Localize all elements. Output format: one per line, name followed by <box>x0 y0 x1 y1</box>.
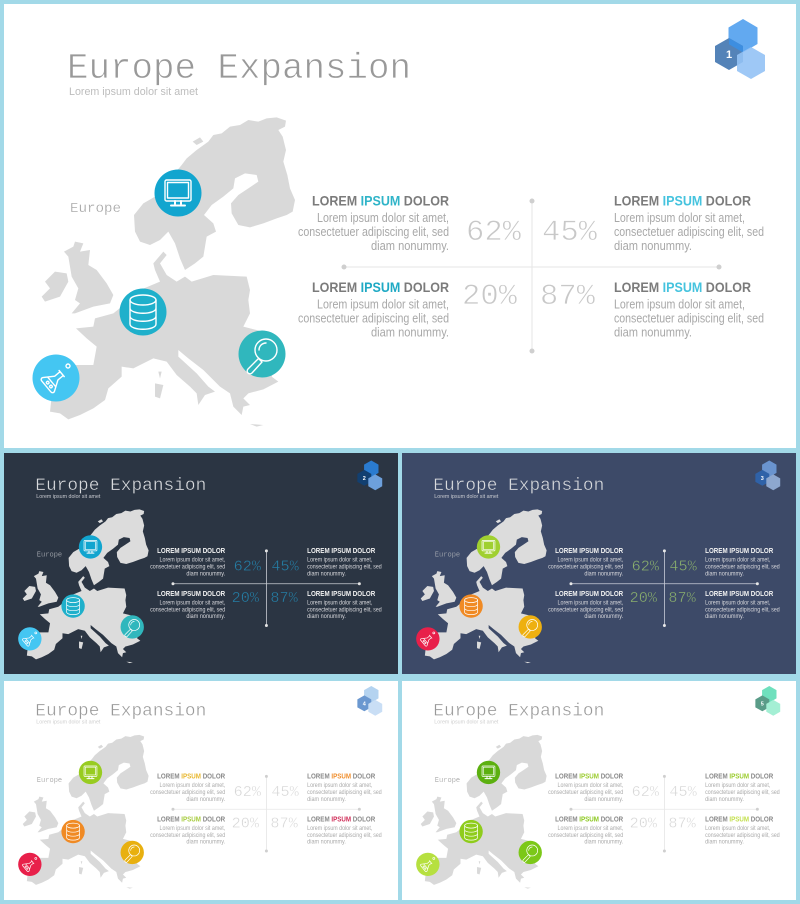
stat: 62%: 62% <box>234 559 261 575</box>
text block: bottom left: Lorem ipsum dolor sit amet, <box>558 825 623 832</box>
text block: top left: diam nonummy. <box>371 238 449 253</box>
text block: top right: consectetuer adipiscing elit, sed <box>307 789 382 796</box>
text block: bottom left: consectetuer adipiscing elit, sed <box>548 832 623 839</box>
text block: top left: consectetuer adipiscing elit, sed <box>150 789 225 796</box>
text block: top left: LOREM IPSUM DOLOR <box>555 774 623 781</box>
stat: 20%: 20% <box>630 591 657 607</box>
text block: bottom right <box>705 591 780 620</box>
icon: database <box>120 288 166 336</box>
text block: bottom right: diam nonummy. <box>307 839 346 846</box>
text block: bottom left <box>548 591 623 620</box>
map of Europe <box>20 735 149 889</box>
stat: 87%: 87% <box>540 280 596 314</box>
text block: bottom right: Lorem ipsum dolor sit amet, <box>705 825 770 832</box>
text block: bottom right: diam nonummy. <box>705 613 744 620</box>
icon: database <box>61 594 85 618</box>
text block: top right: consectetuer adipiscing elit, sed <box>614 224 764 239</box>
text block: top right <box>705 774 780 803</box>
text block: top left: Lorem ipsum dolor sit amet, <box>160 782 225 789</box>
icon: hexagon badge 2 <box>357 460 382 490</box>
text block: bottom left <box>298 279 449 340</box>
text block: top right: Lorem ipsum dolor sit amet, <box>705 556 770 563</box>
subtitle: Lorem ipsum dolor sit amet <box>69 86 198 98</box>
text block: top left: diam nonummy. <box>584 570 623 577</box>
text block: top right: diam nonummy. <box>614 238 692 253</box>
stat: 45%: 45% <box>669 559 697 575</box>
text block: top right: consectetuer adipiscing elit, sed <box>705 563 780 570</box>
text block: top right <box>307 774 382 803</box>
panel: light slide 5 <box>402 681 796 900</box>
text block: top right: diam nonummy. <box>705 796 744 803</box>
text block: top right: Lorem ipsum dolor sit amet, <box>614 210 745 225</box>
text block: bottom left: LOREM IPSUM DOLOR <box>555 591 623 598</box>
subtitle: Lorem ipsum dolor sit amet <box>434 720 499 726</box>
icon: magnifier <box>519 615 542 639</box>
text block: bottom right: diam nonummy. <box>307 613 346 620</box>
icon: monitor <box>79 761 102 784</box>
text block: top left: consectetuer adipiscing elit, sed <box>548 789 623 796</box>
text block: bottom right: consectetuer adipiscing elit, sed <box>307 832 382 839</box>
icon: hexagon badge 1: 1 <box>726 49 732 61</box>
panel: main slide 1 <box>4 4 796 448</box>
text block: bottom right: consectetuer adipiscing elit, sed <box>705 606 780 613</box>
stat: 87%: 87% <box>668 817 696 833</box>
icon: flask <box>416 627 440 651</box>
text block: bottom right: LOREM IPSUM DOLOR <box>705 591 773 598</box>
icon: hexagon badge 4: 4 <box>363 701 366 707</box>
text block: top right <box>614 192 764 253</box>
title: Europe Expansion <box>433 476 604 496</box>
text block: bottom right <box>614 279 764 340</box>
text block: bottom left <box>150 591 225 620</box>
icon: hexagon badge 1 <box>715 19 765 79</box>
text block: bottom left: diam nonummy. <box>584 839 623 846</box>
text block: bottom left: consectetuer adipiscing elit, sed <box>298 310 449 326</box>
stat: 20%: 20% <box>232 591 259 607</box>
text block: bottom left: consectetuer adipiscing elit, sed <box>150 832 225 839</box>
text block: bottom left: diam nonummy. <box>371 324 449 340</box>
stat: 45%: 45% <box>669 785 697 801</box>
text block: top left <box>298 192 449 253</box>
text block: bottom left <box>150 817 225 846</box>
stat: 87%: 87% <box>668 591 696 607</box>
text block: bottom right <box>307 817 382 846</box>
text block: top left <box>548 548 623 577</box>
icon: flask <box>18 853 42 876</box>
text block: bottom right: Lorem ipsum dolor sit amet, <box>614 296 745 312</box>
text block: top right <box>705 548 780 577</box>
stat: 20%: 20% <box>462 280 518 314</box>
icon: database <box>61 820 85 843</box>
text block: top left: LOREM IPSUM DOLOR <box>555 548 623 555</box>
text block: bottom right: Lorem ipsum dolor sit amet, <box>705 599 770 606</box>
text block: top left: consectetuer adipiscing elit, sed <box>298 224 449 239</box>
text block: bottom right: consectetuer adipiscing elit, sed <box>307 606 382 613</box>
text block: bottom right <box>307 591 382 620</box>
text block: top left: diam nonummy. <box>186 570 225 577</box>
icon: flask <box>18 627 42 651</box>
icon: magnifier <box>238 330 286 378</box>
text block: bottom left: Lorem ipsum dolor sit amet, <box>558 599 623 606</box>
map label: Europe <box>435 551 460 559</box>
icon: monitor <box>477 535 500 559</box>
stat: 87%: 87% <box>270 591 298 607</box>
text block: bottom left: consectetuer adipiscing elit, sed <box>548 606 623 613</box>
text block: top left <box>150 548 225 577</box>
text block: top left: Lorem ipsum dolor sit amet, <box>558 782 623 789</box>
text block: top right: LOREM IPSUM DOLOR <box>307 774 375 781</box>
stat: 87%: 87% <box>270 817 298 833</box>
text block: bottom right: LOREM IPSUM DOLOR <box>614 279 751 295</box>
text block: bottom left: LOREM IPSUM DOLOR <box>312 279 449 295</box>
title: Europe Expansion <box>433 701 604 721</box>
cross divider <box>569 549 759 627</box>
text block: bottom left: diam nonummy. <box>584 613 623 620</box>
stat: 62%: 62% <box>466 216 522 250</box>
text block: top right <box>307 548 382 577</box>
icon: database <box>459 820 483 843</box>
text block: bottom left: LOREM IPSUM DOLOR <box>555 817 623 824</box>
icon: hexagon badge 5 <box>755 686 780 716</box>
cross divider <box>342 198 722 354</box>
cross divider <box>171 775 361 852</box>
text block: top right: Lorem ipsum dolor sit amet, <box>307 782 372 789</box>
map of Europe <box>418 735 547 889</box>
text block: bottom right: LOREM IPSUM DOLOR <box>307 591 375 598</box>
icon: magnifier <box>121 615 144 639</box>
cross divider <box>171 549 361 627</box>
icon: flask <box>32 354 80 402</box>
text block: top right: consectetuer adipiscing elit, sed <box>307 563 382 570</box>
icon: hexagon badge 3: 3 <box>761 476 764 482</box>
text block: bottom right: consectetuer adipiscing elit, sed <box>614 310 764 326</box>
text block: top left <box>548 774 623 803</box>
subtitle: Lorem ipsum dolor sit amet <box>36 720 101 726</box>
text block: bottom right: diam nonummy. <box>614 324 692 340</box>
text block: top left: Lorem ipsum dolor sit amet, <box>558 556 623 563</box>
text block: top left: Lorem ipsum dolor sit amet, <box>160 556 225 563</box>
text block: top left <box>150 774 225 803</box>
text block: top right: consectetuer adipiscing elit, sed <box>705 789 780 796</box>
stat: 45%: 45% <box>271 559 299 575</box>
text block: top right: diam nonummy. <box>307 796 346 803</box>
text block: top left: LOREM IPSUM DOLOR <box>157 774 225 781</box>
map of Europe <box>37 117 295 427</box>
text block: bottom left: diam nonummy. <box>186 839 225 846</box>
icon: flask <box>416 853 440 876</box>
stat: 62%: 62% <box>632 559 659 575</box>
text block: bottom right: Lorem ipsum dolor sit amet, <box>307 599 372 606</box>
stat: 62%: 62% <box>632 785 659 801</box>
icon: hexagon badge 2: 2 <box>363 476 366 482</box>
title: Europe Expansion <box>35 701 206 721</box>
panel: navy slide 3 <box>402 453 796 674</box>
text block: top right: Lorem ipsum dolor sit amet, <box>705 782 770 789</box>
subtitle: Lorem ipsum dolor sit amet <box>434 494 499 500</box>
title: Europe Expansion <box>35 476 206 496</box>
text block: bottom right: consectetuer adipiscing elit, sed <box>705 832 780 839</box>
stat: 45%: 45% <box>271 785 299 801</box>
map label: Europe <box>37 551 62 559</box>
text block: bottom right <box>705 817 780 846</box>
icon: database <box>459 594 483 618</box>
text block: bottom left: diam nonummy. <box>186 613 225 620</box>
panel: dark slate slide 2 <box>4 453 398 674</box>
icon: monitor <box>477 761 500 784</box>
text block: bottom left: LOREM IPSUM DOLOR <box>157 591 225 598</box>
stat: 45%: 45% <box>542 216 598 250</box>
map label: Europe <box>70 201 121 217</box>
text block: bottom left: Lorem ipsum dolor sit amet, <box>160 825 225 832</box>
text block: top left: consectetuer adipiscing elit, sed <box>150 563 225 570</box>
text block: top right: LOREM IPSUM DOLOR <box>307 548 375 555</box>
text block: top right: diam nonummy. <box>705 570 744 577</box>
text block: top left: Lorem ipsum dolor sit amet, <box>317 210 449 225</box>
icon: monitor <box>79 535 102 559</box>
text block: bottom right: diam nonummy. <box>705 839 744 846</box>
title: Europe Expansion <box>67 48 411 89</box>
stat: 62%: 62% <box>234 785 261 801</box>
text block: top left: diam nonummy. <box>186 796 225 803</box>
icon: magnifier <box>519 841 542 864</box>
icon: hexagon badge 3 <box>755 460 780 490</box>
text block: top right: diam nonummy. <box>307 570 346 577</box>
text block: bottom left: consectetuer adipiscing elit, sed <box>150 606 225 613</box>
text block: bottom left <box>548 817 623 846</box>
stat: 20%: 20% <box>232 817 259 833</box>
text block: bottom right: LOREM IPSUM DOLOR <box>307 817 375 824</box>
text block: top left: diam nonummy. <box>584 796 623 803</box>
text block: top right: LOREM IPSUM DOLOR <box>705 548 773 555</box>
map label: Europe <box>37 777 62 785</box>
map label: Europe <box>435 777 460 785</box>
text block: bottom left: LOREM IPSUM DOLOR <box>157 817 225 824</box>
subtitle: Lorem ipsum dolor sit amet <box>36 494 101 500</box>
icon: magnifier <box>121 841 144 864</box>
text block: top right: Lorem ipsum dolor sit amet, <box>307 556 372 563</box>
text block: bottom left: Lorem ipsum dolor sit amet, <box>317 296 449 312</box>
panel: light slide 4 <box>4 681 398 900</box>
text block: top left: LOREM IPSUM DOLOR <box>157 548 225 555</box>
icon: hexagon badge 4 <box>357 686 382 716</box>
icon: hexagon badge 5: 5 <box>761 701 764 707</box>
cross divider <box>569 775 759 852</box>
stat: 20%: 20% <box>630 817 657 833</box>
text block: bottom right: LOREM IPSUM DOLOR <box>705 817 773 824</box>
text block: top right: LOREM IPSUM DOLOR <box>614 192 751 208</box>
text block: top left: consectetuer adipiscing elit, sed <box>548 563 623 570</box>
text block: top right: LOREM IPSUM DOLOR <box>705 774 773 781</box>
map of Europe <box>20 509 149 663</box>
icon: monitor <box>154 170 202 216</box>
text block: bottom left: Lorem ipsum dolor sit amet, <box>160 599 225 606</box>
text block: bottom right: Lorem ipsum dolor sit amet, <box>307 825 372 832</box>
map of Europe <box>418 509 547 663</box>
text block: top left: LOREM IPSUM DOLOR <box>312 192 449 208</box>
